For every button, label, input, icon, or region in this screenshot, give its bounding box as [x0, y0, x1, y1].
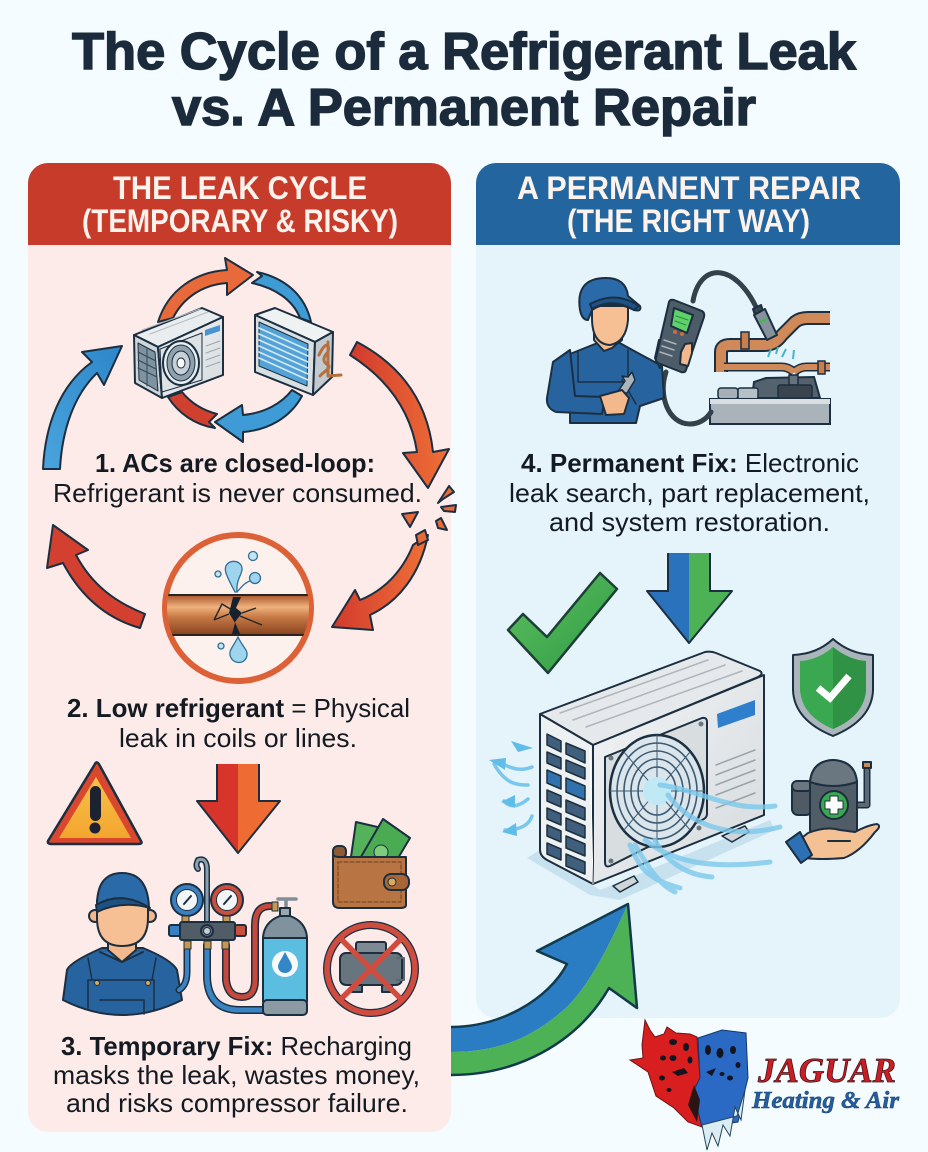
text: step 3: 3. Temporary Fix: Recharging — [61, 1031, 412, 1061]
logo wordmark — [751, 1051, 900, 1114]
icon: wallet with cash — [333, 819, 410, 908]
small closed-loop arrows — [158, 258, 311, 442]
panel: a permanent repair — [476, 163, 900, 1018]
refrigerant tank — [263, 899, 307, 1015]
side louvers — [547, 734, 585, 874]
text: step 1: 1. ACs are closed-loop: — [95, 448, 375, 478]
icon: compressor crossed out — [327, 925, 415, 1013]
arrow: red down arrow — [197, 764, 280, 853]
text: step 4: leak search, part replacement, — [509, 478, 870, 508]
leopard spots — [659, 1039, 740, 1092]
panel header: permanent repair: (THE RIGHT WAY) — [567, 203, 810, 239]
icon: small wind arrowheads — [489, 741, 533, 836]
panel header: leak cycle — [28, 163, 451, 245]
icon: copper pipes and compressor base — [710, 318, 830, 424]
fan panel — [605, 718, 707, 866]
arrow: left large red — [47, 525, 145, 628]
panel header: permanent repair: A PERMANENT REPAIR — [517, 170, 861, 206]
arrow: curved blue-green arrow — [451, 904, 637, 1075]
icon: coil unit — [255, 308, 341, 395]
icon: manifold gauge set and refrigerant tank — [169, 859, 307, 1015]
text: step 4 — [509, 448, 870, 537]
icon: warning triangle — [48, 762, 142, 844]
leak droplets — [215, 552, 260, 662]
icon: technician with leak detector — [547, 273, 777, 424]
panel header: leak cycle: THE LEAK CYCLE — [113, 170, 367, 206]
text: step 4: 4. Permanent Fix: Electronic — [521, 448, 859, 478]
icon: outdoor condenser unit — [134, 308, 223, 398]
panel header: permanent repair — [476, 163, 900, 245]
arrow: right large orange — [350, 342, 449, 488]
arrow: lower right orange broken — [332, 535, 428, 630]
text: step 3: and risks compressor failure. — [66, 1088, 408, 1118]
icon: shield with check — [793, 639, 873, 736]
text: step 2 — [67, 693, 410, 753]
text: step 1 — [53, 448, 422, 508]
text: step 2: 2. Low refrigerant = Physical — [67, 693, 410, 723]
panel body: permanent repair — [476, 245, 900, 1018]
logo: Jaguar Heating & Air — [630, 1020, 900, 1150]
logo wordmark: Heating & Air — [751, 1088, 900, 1114]
text: step 4: and system restoration. — [549, 507, 830, 537]
panel body: leak cycle — [28, 245, 451, 1132]
title — [72, 23, 856, 137]
gauges — [169, 884, 246, 949]
text: step 2: leak in coils or lines. — [119, 723, 357, 753]
hoses — [179, 859, 270, 1010]
panel header: leak cycle: (TEMPORARY & RISKY) — [82, 203, 398, 239]
pipe crack — [229, 597, 242, 634]
icon: large outdoor AC unit — [527, 652, 775, 900]
arrow: blue-green down arrow — [647, 553, 732, 643]
logo mark: two-tone jaguar head — [630, 1020, 748, 1150]
detector cable — [663, 273, 757, 424]
icon: green check mark — [508, 573, 617, 673]
fan — [610, 735, 704, 847]
text: step 1: Refrigerant is never consumed. — [53, 478, 422, 508]
logo wordmark: JAGUAR — [757, 1051, 896, 1090]
icon: air flow streaks — [494, 762, 780, 892]
text: step 3 — [53, 1031, 420, 1118]
icon: arrow break shards — [402, 486, 456, 545]
text: step 3: masks the leak, wastes money, — [53, 1060, 420, 1090]
detector probe — [753, 305, 777, 340]
title: The Cycle of a Refrigerant Leak — [72, 23, 856, 81]
icon: cracked copper pipe in circle — [160, 535, 316, 681]
panel: the leak cycle — [28, 163, 456, 1132]
icon: technician with cap — [63, 873, 182, 1015]
technician — [547, 278, 664, 423]
title: vs. A Permanent Repair — [172, 79, 756, 137]
leak detector — [655, 300, 704, 372]
arrow: left large blue — [43, 346, 122, 469]
icon: compressor held by hand — [786, 760, 879, 863]
